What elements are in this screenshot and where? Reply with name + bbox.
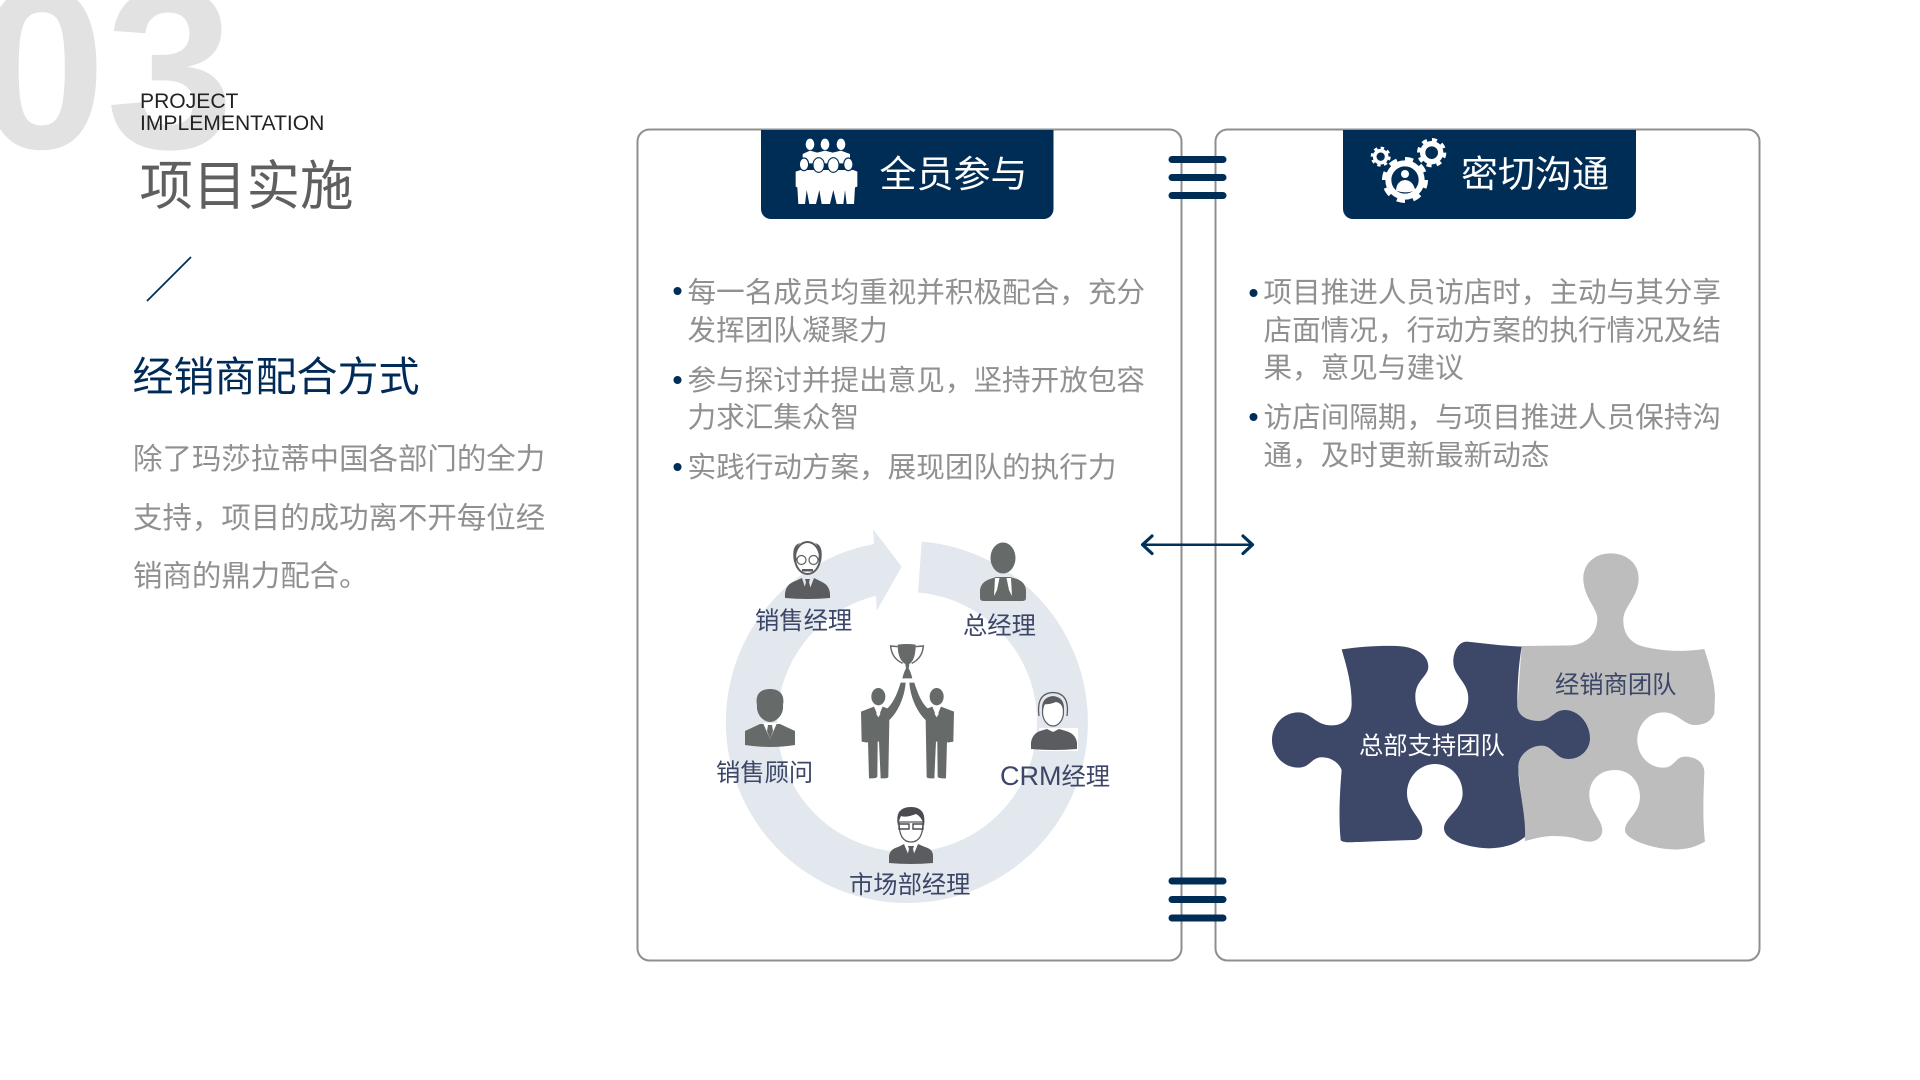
cycle arrow ring xyxy=(726,529,1088,903)
role: general manager: 总经理 xyxy=(963,613,1036,640)
bullet list: 项目推进人员访店时，主动与其分享 xyxy=(1264,277,1721,309)
english heading xyxy=(140,90,324,135)
trophy xyxy=(891,644,923,678)
icon: team xyxy=(796,139,857,204)
icon: winners with trophy xyxy=(861,644,954,778)
bullet list: 参与探讨并提出意见，坚持开放包容 xyxy=(688,365,1145,397)
bullet list: 力求汇集众智 xyxy=(688,402,859,434)
bullet list xyxy=(1250,277,1721,472)
role: general manager xyxy=(963,542,1036,640)
bullet list: 每一名成员均重视并积极配合，充分 xyxy=(688,277,1145,309)
role: sales consultant xyxy=(716,689,813,787)
role: marketing manager xyxy=(849,807,970,899)
connector bars: top xyxy=(1168,156,1226,199)
panel: close communication xyxy=(1216,130,1760,960)
intro paragraph: 支持，项目的成功离不开每位经 xyxy=(133,502,545,535)
intro paragraph: 除了玛莎拉蒂中国各部门的全力 xyxy=(133,443,545,476)
bullet list: 通，及时更新最新动态 xyxy=(1264,440,1549,472)
puzzle piece: dealer team: 经销商团队 xyxy=(1555,672,1676,699)
header: full participation xyxy=(761,130,1054,219)
icon: gears xyxy=(1372,140,1444,201)
puzzle piece: dealer team xyxy=(1517,553,1715,849)
bullet list: 果，意见与建议 xyxy=(1264,352,1464,384)
header label: 全员参与 xyxy=(880,154,1028,195)
puzzle piece: headquarters team: 总部支持团队 xyxy=(1359,733,1505,760)
role: marketing manager: 市场部经理 xyxy=(849,872,970,899)
bullet list: 访店间隔期，与项目推进人员保持沟 xyxy=(1264,402,1721,434)
bullet list: 实践行动方案，展现团队的执行力 xyxy=(688,452,1116,484)
header label: 密切沟通 xyxy=(1461,154,1609,195)
puzzle diagram xyxy=(1272,553,1715,849)
connector bars: bottom xyxy=(1168,878,1226,922)
role: CRM manager xyxy=(1000,692,1110,791)
cycle diagram xyxy=(716,529,1110,903)
double-headed arrow xyxy=(1142,536,1252,554)
role: CRM manager: CRM经理 xyxy=(1000,761,1110,791)
panel: full participation xyxy=(638,130,1182,960)
bullet list: 发挥团队凝聚力 xyxy=(688,315,888,347)
role: sales manager: 销售经理 xyxy=(755,608,852,635)
subheading: 经销商配合方式 xyxy=(132,354,420,400)
intro paragraph xyxy=(133,443,545,593)
man right xyxy=(909,683,954,778)
english heading: PROJECT xyxy=(140,90,239,113)
intro paragraph: 销商的鼎力配合。 xyxy=(133,560,369,593)
man left xyxy=(861,683,906,778)
bullet list: 店面情况，行动方案的执行情况及结 xyxy=(1264,315,1721,347)
puzzle piece: headquarters team xyxy=(1272,642,1590,848)
role: sales consultant: 销售顾问 xyxy=(716,760,813,787)
role: sales manager xyxy=(755,542,852,635)
title: 项目实施 xyxy=(140,158,354,216)
header: close communication xyxy=(1343,130,1636,219)
bullet list xyxy=(674,277,1145,484)
slash accent xyxy=(147,257,191,301)
english heading: IMPLEMENTATION xyxy=(140,112,324,135)
